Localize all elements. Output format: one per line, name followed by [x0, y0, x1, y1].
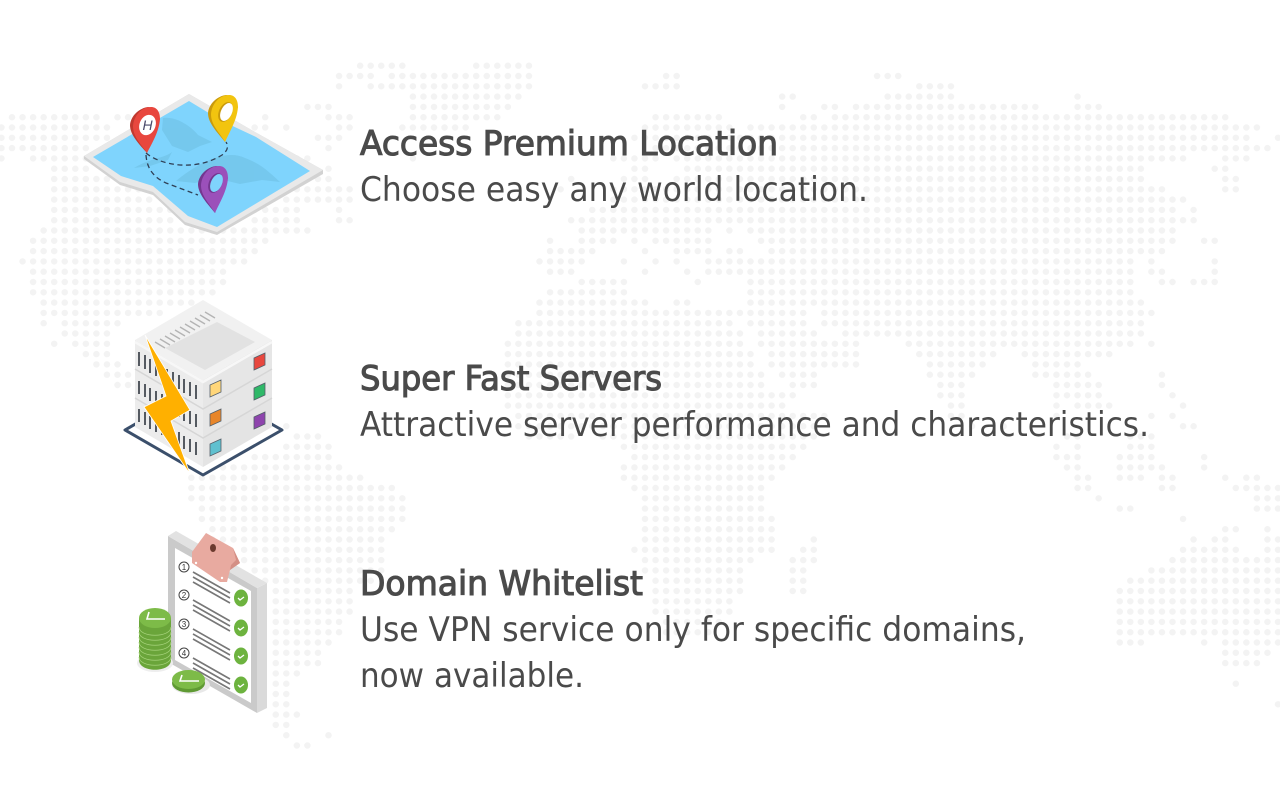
pin: purple: [198, 166, 228, 213]
icon: folded map with pins: [84, 94, 323, 235]
side vents: [139, 352, 196, 455]
icon: clipboard checklist with coins: [137, 531, 267, 713]
heading: Super Fast Servers: Super Fast Servers: [360, 359, 662, 398]
pin: red hotel: [130, 107, 160, 153]
text: Use VPN service description: Use VPN service only for specific domains,: [360, 610, 1026, 649]
text: Use VPN service description: [360, 610, 1026, 695]
number labels: 2: [182, 591, 187, 600]
top vents: [155, 312, 215, 348]
green checks: [234, 590, 248, 694]
base plate: [125, 385, 282, 475]
number labels: 4: [182, 649, 187, 658]
pin: yellow: [208, 95, 238, 142]
checklist lines: [193, 572, 230, 689]
clip: [192, 533, 240, 582]
server layers: [135, 300, 272, 467]
text: Choose easy any world location: Choose easy any world location.: [360, 170, 868, 209]
status lights: [210, 353, 265, 456]
text: Attractive server performance: Attractive server performance and characteristics.: [360, 405, 1149, 444]
clipboard board: [168, 531, 267, 713]
text: Use VPN service description: now available.: [360, 656, 584, 695]
number labels: 1: [182, 563, 187, 572]
map paper: [84, 94, 323, 235]
icon: server stack with lightning bolt: [125, 300, 282, 475]
pin: red hotel: H: [142, 117, 153, 133]
heading: Domain Whitelist: Domain Whitelist: [360, 564, 643, 603]
coin stack: [137, 608, 173, 672]
lightning bolt: [144, 335, 190, 474]
check marks: [238, 597, 244, 687]
heading: Access Premium Location: Access Premium Location: [360, 124, 778, 163]
number labels: [182, 563, 187, 658]
number labels: 3: [182, 620, 187, 629]
map continents: [134, 118, 280, 184]
flat coin: [172, 670, 210, 694]
checklist numbers: [179, 562, 189, 658]
dashed route: [146, 142, 227, 195]
